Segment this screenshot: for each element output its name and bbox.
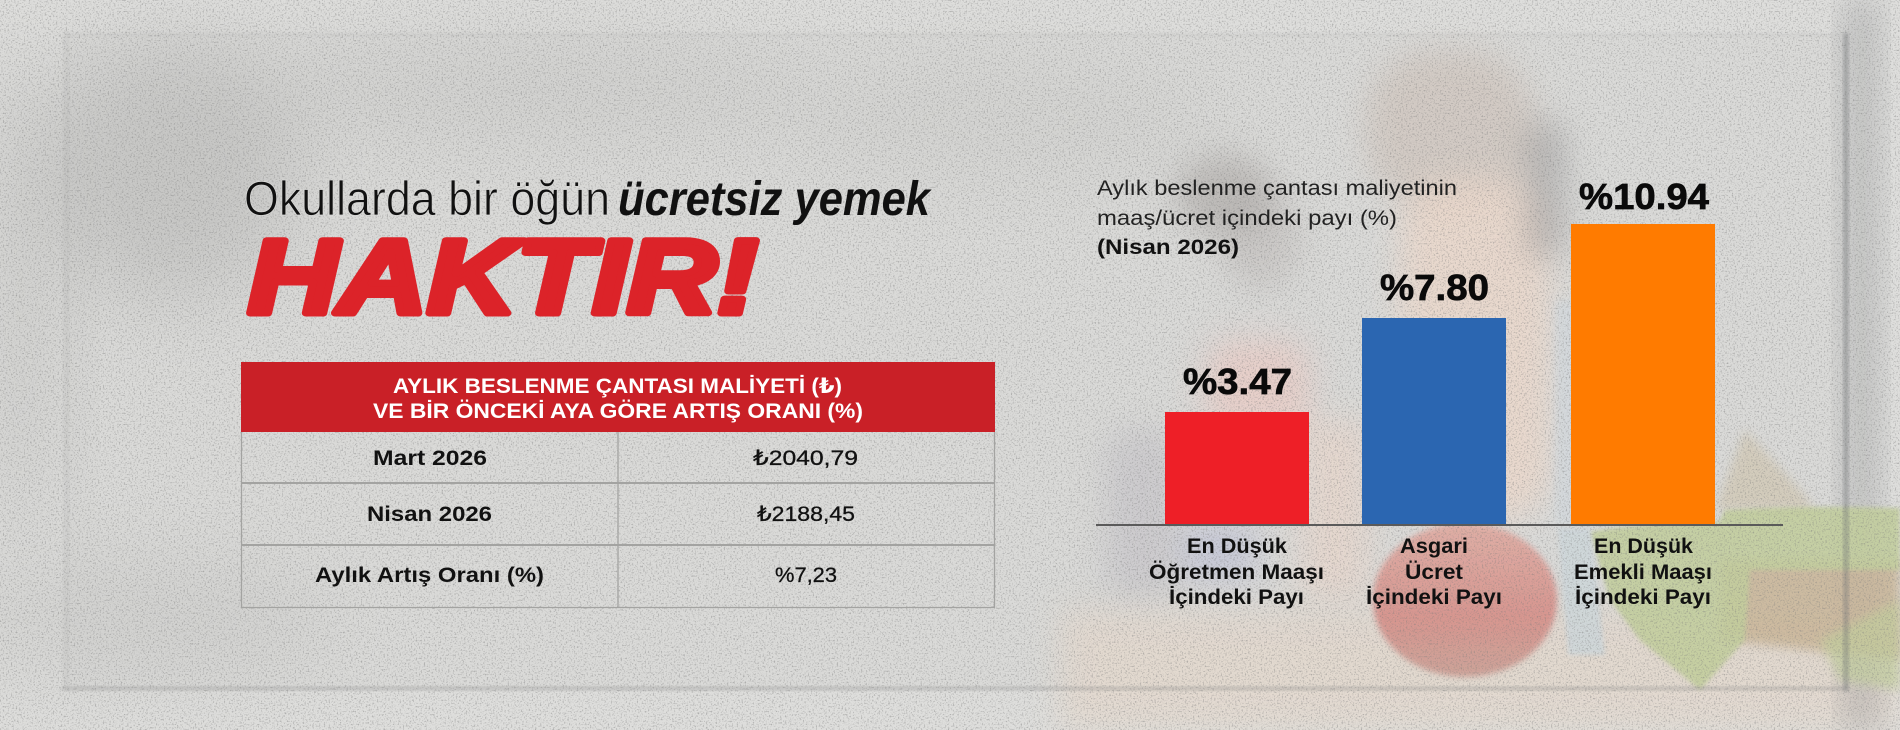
row: Mart 2026: Mart 2026 <box>373 447 487 470</box>
figure: child <box>1105 155 1370 600</box>
bottle behind the orange bar <box>1555 300 1605 525</box>
row: monthly increase: Aylık Artış Oranı (%) <box>315 564 544 587</box>
label: pension: En Düşük <box>1594 535 1693 558</box>
label: minimum wage: Ücret <box>1405 561 1463 584</box>
label: teacher <box>1149 535 1324 609</box>
lunch box tan <box>1715 430 1815 510</box>
label: teacher: En Düşük <box>1187 535 1287 558</box>
row: Mart 2026: ₺2040,79 <box>753 447 858 470</box>
label: teacher: İçindeki Payı <box>1169 586 1304 609</box>
bar: minimum wage share <box>1362 267 1506 525</box>
row: Nisan 2026 <box>367 503 855 526</box>
row: Nisan 2026: Nisan 2026 <box>367 503 492 526</box>
row: monthly increase: %7,23 <box>775 564 837 587</box>
bar chart <box>1096 176 1783 609</box>
chart baseline <box>1096 524 1783 526</box>
table grid <box>241 432 995 608</box>
apple <box>1373 523 1557 677</box>
bar: pension share <box>1571 176 1715 525</box>
table header: AYLIK BESLENME ÇANTASI MALİYETİ (₺) <box>393 375 842 398</box>
bar: minimum wage share: %7.80 <box>1380 267 1489 308</box>
label: pension: İçindeki Payı <box>1575 586 1711 609</box>
chart heading <box>1097 176 1457 259</box>
row: Nisan 2026: ₺2188,45 <box>757 503 855 526</box>
label: pension <box>1574 535 1712 609</box>
figure: adult head and torso <box>1365 50 1565 520</box>
bar: pension share: %10.94 <box>1579 176 1709 217</box>
table surface <box>1060 610 1900 730</box>
row: Mart 2026 <box>373 447 858 470</box>
lettuce green <box>1590 507 1900 690</box>
chart heading: maaş/ücret içindeki payı (%) <box>1097 206 1397 230</box>
title line: ücretsiz yemek <box>618 173 932 226</box>
table header: VE BİR ÖNCEKİ AYA GÖRE ARTIŞ ORANI (%) <box>373 400 863 423</box>
row: monthly increase <box>315 564 837 587</box>
table header <box>241 362 995 432</box>
bar: teacher salary share <box>1165 361 1309 525</box>
chart heading: Aylık beslenme çantası maliyetinin <box>1097 176 1457 200</box>
bar: teacher salary share: %3.47 <box>1183 361 1292 402</box>
title line: Okullarda bir öğün <box>244 173 610 226</box>
title line <box>244 173 932 226</box>
headline: HAKTIR!: HAKTIR! <box>248 219 758 336</box>
label: pension: Emekli Maaşı <box>1574 561 1712 584</box>
label: minimum wage: Asgari <box>1400 535 1468 558</box>
chart heading: (Nisan 2026) <box>1097 235 1239 259</box>
right wall shadow band <box>1846 0 1876 730</box>
label: teacher: Öğretmen Maaşı <box>1149 561 1324 584</box>
bottle base <box>1558 528 1605 655</box>
background: blurred photo of child and apple <box>1060 0 1900 730</box>
label: minimum wage: İçindeki Payı <box>1366 586 1502 609</box>
table: monthly lunchbox cost <box>241 362 995 608</box>
label: minimum wage <box>1366 535 1502 609</box>
